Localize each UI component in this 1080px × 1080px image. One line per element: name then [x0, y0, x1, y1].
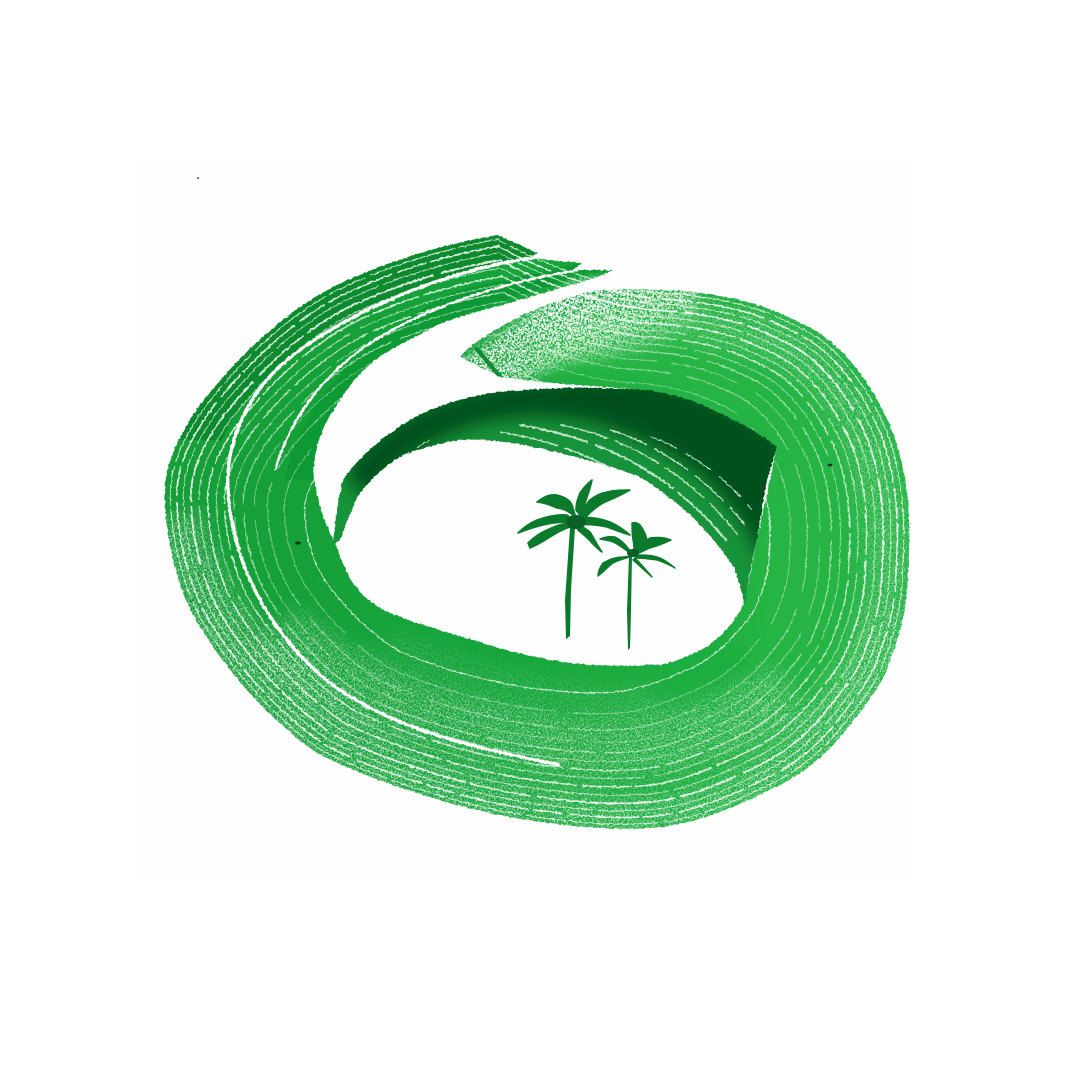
darker first bristle band at the top left — [170, 235, 538, 440]
mid-green second and third bands — [285, 263, 613, 480]
paper background — [135, 160, 910, 882]
light streaks in the inner stroke — [404, 424, 752, 542]
illustration: green brush ring with palm trees — [164, 177, 910, 830]
bristle streaks — [170, 239, 904, 824]
ink specks — [197, 177, 833, 545]
white gap between first and second bands — [228, 257, 560, 765]
speckled wash on the right side — [690, 320, 888, 620]
speckled dry-brush wash along the bottom — [165, 520, 900, 827]
brush ring: main green stroke — [165, 235, 909, 829]
icon: small palm tree — [598, 523, 675, 650]
dark inner brush stroke — [333, 375, 790, 605]
darkest upper part of the inner stroke — [341, 387, 777, 564]
speckled wash in the middle of the bottom band — [275, 630, 790, 748]
white gap between second and third bands — [275, 270, 578, 470]
dark crown of the large palm — [566, 515, 586, 529]
dark crown of the small palm — [627, 549, 639, 557]
light right side of the stroke — [520, 290, 908, 725]
dry grainy start of the stroke — [440, 278, 700, 395]
small dark crease at the stroke start — [474, 346, 503, 377]
speckled wash on the inner bottom band — [390, 640, 660, 700]
icon: large palm tree — [518, 480, 630, 639]
